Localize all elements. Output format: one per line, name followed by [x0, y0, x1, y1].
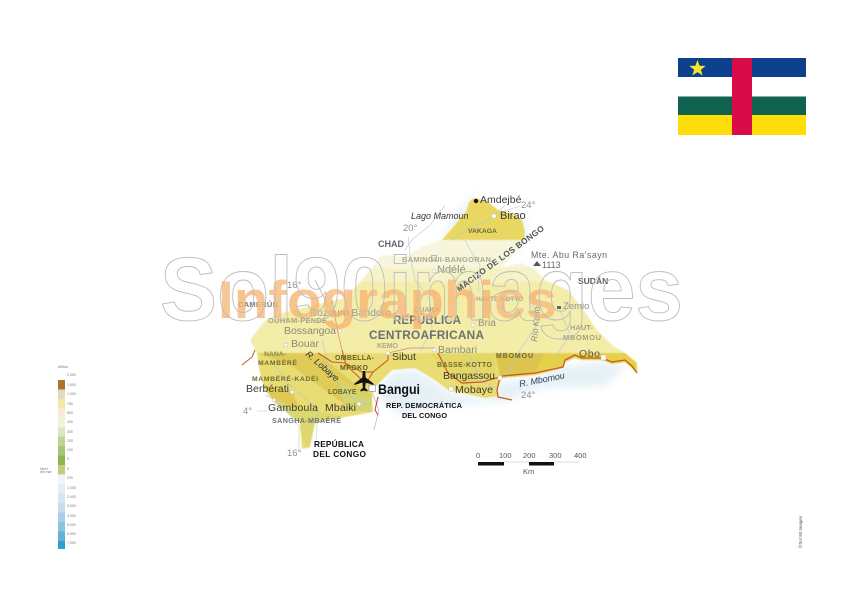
- map labels: towns and regions: HAUT-: [570, 323, 593, 332]
- map labels: towns and regions: KEMO: [377, 343, 399, 350]
- map labels: towns and regions: Bangui: [378, 382, 420, 397]
- map labels: towns and regions: Mte. Abu Ra'sayn: [531, 250, 607, 260]
- elevation and depth legend: 0: [67, 467, 69, 471]
- map labels: towns and regions: OUAKA: [414, 307, 440, 314]
- graticule labels: 20°: [403, 223, 418, 234]
- map labels: towns and regions: Amdejbé: [480, 194, 522, 206]
- map labels: towns and regions: DEL CONGO: [402, 411, 447, 420]
- watermark: Infographics: Infographics: [218, 271, 557, 330]
- scale bar: 200: [523, 451, 536, 460]
- map labels: towns and regions: CAMERÚN: [238, 300, 278, 309]
- map labels: towns and regions: Obo: [579, 348, 600, 360]
- map labels: towns and regions: R. Lobaye: [304, 349, 341, 383]
- elevation and depth legend: del mar: [40, 470, 53, 474]
- flag of the Central African Republic: [678, 58, 806, 135]
- map labels: towns and regions: MAMBÉRÉ-KADÉI: [252, 374, 318, 383]
- map labels: towns and regions: OUHAM-PENDÉ: [268, 316, 327, 325]
- map labels: towns and regions: Río Kotto: [529, 306, 542, 342]
- map labels: towns and regions: Birao: [500, 210, 526, 222]
- elevation and depth legend: 300: [67, 430, 73, 434]
- watermark: Sol90images: Sol90images: [160, 240, 683, 340]
- scale bar: [476, 451, 587, 476]
- scale bar: 100: [499, 451, 512, 460]
- map labels: towns and regions: Sibut: [392, 351, 416, 363]
- map labels: towns and regions: Mbaiki: [325, 402, 356, 414]
- roads: [242, 280, 637, 415]
- graticule labels: 24°: [521, 200, 536, 211]
- elevation and depth legend: 3.000: [67, 504, 76, 508]
- map labels: towns and regions: 1113: [542, 260, 561, 270]
- elevation and depth legend: 1.500: [67, 383, 76, 387]
- city markers: [272, 214, 606, 406]
- elevation and depth legend: 1.000: [67, 392, 76, 396]
- scale bar: Km: [523, 467, 534, 476]
- elevation and depth legend: 2.000: [67, 495, 76, 499]
- map labels: towns and regions: MBOMOU: [496, 353, 533, 360]
- graticule labels: 24°: [521, 390, 536, 401]
- elevation and depth legend: 6.000: [67, 532, 76, 536]
- elevation and depth legend: 7.000: [67, 541, 76, 545]
- map labels: towns and regions: CHAD: [378, 239, 404, 249]
- elevation and depth legend: 2.000: [67, 373, 76, 377]
- credit: ©Sol 90 Images: [797, 515, 803, 548]
- graticule labels: 16°: [287, 448, 302, 459]
- map labels: towns and regions: Lago Mamoun: [411, 211, 469, 221]
- elevation and depth legend: Altitud: [58, 365, 68, 369]
- icon: airplane at Bangui: [354, 371, 374, 392]
- map labels: towns and regions: MAMBÈRÉ: [258, 358, 297, 367]
- map labels: towns and regions: MACIZO DE LOS BONGO: [454, 223, 546, 294]
- map labels: towns and regions: MPOKO: [340, 365, 369, 372]
- scale bar: 400: [574, 451, 587, 460]
- map labels: towns and regions: SUDÁN: [578, 276, 608, 286]
- map labels: towns and regions: Bangassou: [443, 370, 495, 382]
- elevation and depth legend: 200: [67, 476, 73, 480]
- map labels: towns and regions: Gamboula: [268, 402, 318, 414]
- elevation and depth legend: 200: [67, 439, 73, 443]
- water halo along southern border: [375, 362, 625, 415]
- scale bar: 300: [549, 451, 562, 460]
- elevation and depth legend: 1.000: [67, 486, 76, 490]
- map labels: towns and regions: Bossangoa: [284, 325, 336, 337]
- map labels: towns and regions: Mobaye: [455, 384, 493, 396]
- map labels: towns and regions: REP. DEMOCRÁTICA: [386, 401, 463, 410]
- map labels: towns and regions: REPÚBLICA: [393, 314, 461, 327]
- rivers: [265, 205, 570, 440]
- map labels: towns and regions: OMBELLA-: [335, 355, 375, 362]
- map labels: towns and regions: Ndélé: [437, 264, 466, 276]
- map labels: towns and regions: LOBAYE: [328, 389, 357, 396]
- map labels: towns and regions: Zemio: [563, 301, 589, 312]
- map labels: towns and regions: BAMINGUI-BANGORAN: [402, 255, 491, 264]
- map labels: towns and regions: Bouar: [291, 338, 320, 350]
- elevation and depth legend: Nivel: [40, 467, 48, 471]
- map labels: towns and regions: R. Mbomou: [518, 370, 566, 389]
- map labels: towns and regions: NANA-: [264, 351, 286, 358]
- elevation and depth legend: 400: [67, 420, 73, 424]
- elevation and depth legend: 500: [67, 411, 73, 415]
- elevation and depth legend: [40, 365, 76, 549]
- elevation and depth legend: 100: [67, 448, 73, 452]
- elevation and depth legend: 5.000: [67, 523, 76, 527]
- map: relief of the country: [242, 197, 638, 450]
- map labels: towns and regions: [238, 194, 608, 459]
- graticule labels: 4°: [243, 406, 252, 417]
- graticule labels: 16°: [287, 280, 302, 291]
- map labels: towns and regions: MBOMOU: [563, 333, 601, 342]
- map labels: towns and regions: Berbérati: [246, 383, 289, 395]
- map labels: towns and regions: HAUTE-KOTTO: [476, 296, 523, 303]
- map labels: towns and regions: BASSE-KOTTO: [437, 362, 493, 369]
- map labels: towns and regions: Bambari: [438, 344, 477, 356]
- map labels: towns and regions: Bria: [478, 318, 496, 329]
- elevation and depth legend: 750: [67, 402, 73, 406]
- scale bar: 0: [476, 451, 480, 460]
- map labels: towns and regions: DEL CONGO: [313, 449, 367, 459]
- map labels: towns and regions: SANGHA-MBAÉRÉ: [272, 416, 341, 425]
- elevation and depth legend: 4.000: [67, 514, 76, 518]
- map labels: towns and regions: REPÚBLICA: [314, 438, 364, 449]
- map labels: towns and regions: Bozoum Bandoro: [310, 307, 391, 319]
- map labels: towns and regions: CENTROAFRICANA: [369, 328, 484, 342]
- graticule labels: [243, 200, 536, 459]
- map labels: towns and regions: VAKAGA: [468, 228, 497, 235]
- elevation and depth legend: 0: [67, 457, 69, 461]
